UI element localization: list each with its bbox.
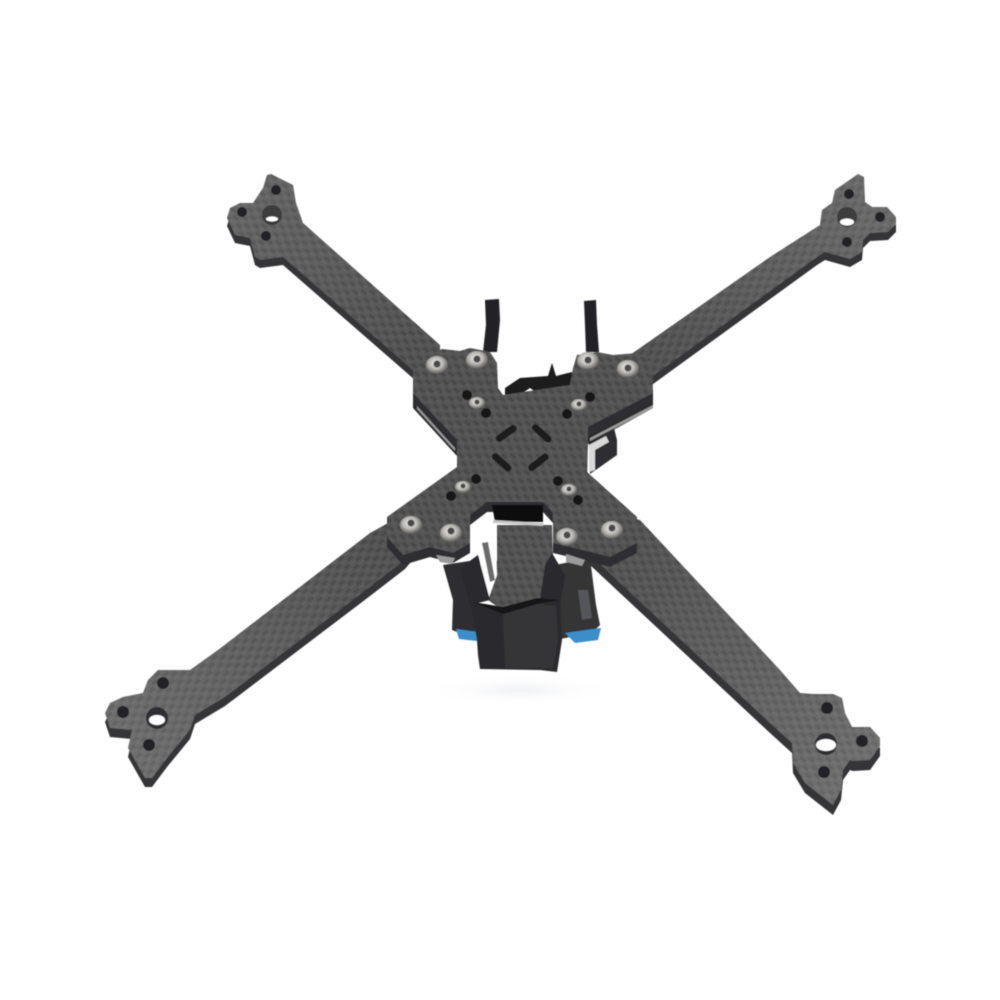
tip holes xyxy=(117,185,885,778)
inner carbon plate xyxy=(488,525,553,612)
side braces xyxy=(460,555,490,605)
plate slots xyxy=(490,423,553,473)
camera pod xyxy=(470,600,562,672)
dark standoff bodies xyxy=(443,560,480,640)
plate holes xyxy=(446,390,595,505)
arm sides xyxy=(105,182,896,815)
notch interior xyxy=(492,505,543,522)
black camera mount behind the plate xyxy=(505,363,573,396)
white gap in notch xyxy=(478,524,497,600)
arm: top left xyxy=(227,174,440,400)
wing underside blocks xyxy=(413,390,653,456)
silver standoff strips xyxy=(417,405,653,566)
screws xyxy=(400,351,639,546)
centre plate side xyxy=(387,358,653,567)
arm tip lighting xyxy=(105,174,896,805)
rear lower assembly xyxy=(443,524,601,672)
pin xyxy=(482,542,495,582)
arm: bottom left xyxy=(105,500,430,778)
centre plate xyxy=(387,348,653,557)
screw sockets xyxy=(408,356,632,538)
soft shadow xyxy=(420,674,620,706)
right side bracket xyxy=(588,420,617,474)
antenna mounts xyxy=(483,299,599,352)
arm: top right xyxy=(620,174,896,400)
motor holes xyxy=(146,205,857,755)
arm: bottom right xyxy=(560,500,880,805)
blue pads xyxy=(456,629,478,641)
